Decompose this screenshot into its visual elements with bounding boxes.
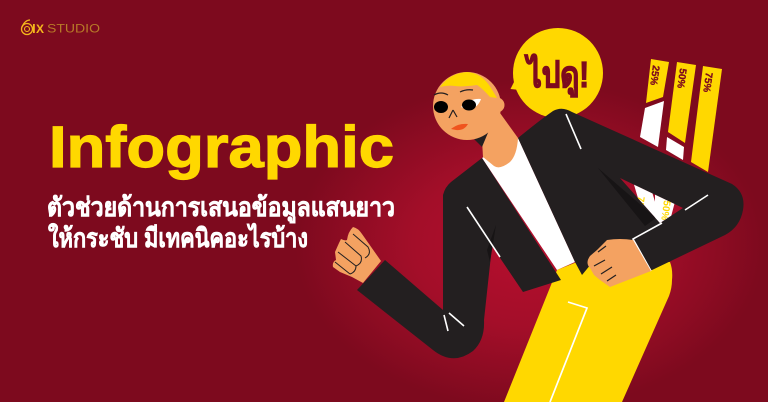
shirt	[482, 138, 575, 270]
gap between arm and body: 75	[633, 196, 646, 209]
jacket: body and right arm	[518, 109, 744, 275]
speech bubble	[510, 28, 603, 118]
brows	[434, 90, 473, 95]
neck	[482, 113, 518, 167]
title: Infographic	[49, 115, 394, 180]
bar: 75%: 75%	[700, 72, 714, 93]
hair	[440, 72, 497, 98]
head	[433, 72, 504, 147]
gap between arm and body: 50%	[658, 200, 672, 221]
jacket shadow	[487, 168, 656, 262]
speech bubble: ไปดู!	[524, 53, 589, 98]
nose	[449, 110, 457, 118]
left fist	[333, 227, 381, 283]
logo: 6ix Studio	[22, 20, 100, 36]
subtitle: ให้กระชับ มีเทคนิคอะไรบ้าง	[48, 222, 308, 253]
figure	[333, 72, 744, 402]
jacket stitching lines	[444, 114, 708, 331]
mouth	[451, 124, 468, 130]
trousers	[504, 262, 672, 402]
bar: 50%: 50%	[674, 68, 688, 89]
jacket: left panel and arm	[357, 158, 561, 358]
gap between arm and body	[620, 178, 683, 223]
logo: 6ix Studio: STUDIO	[47, 22, 100, 36]
logo: 6ix Studio: X	[36, 22, 44, 36]
right hand	[588, 239, 651, 287]
subtitle	[47, 192, 395, 253]
eyes	[434, 101, 448, 113]
subtitle: ตัวช่วยด้านการเสนอข้อมูลแสนยาว	[47, 192, 395, 224]
bar: 25%: 25%	[647, 65, 661, 86]
progress bars behind the figure	[640, 59, 722, 172]
